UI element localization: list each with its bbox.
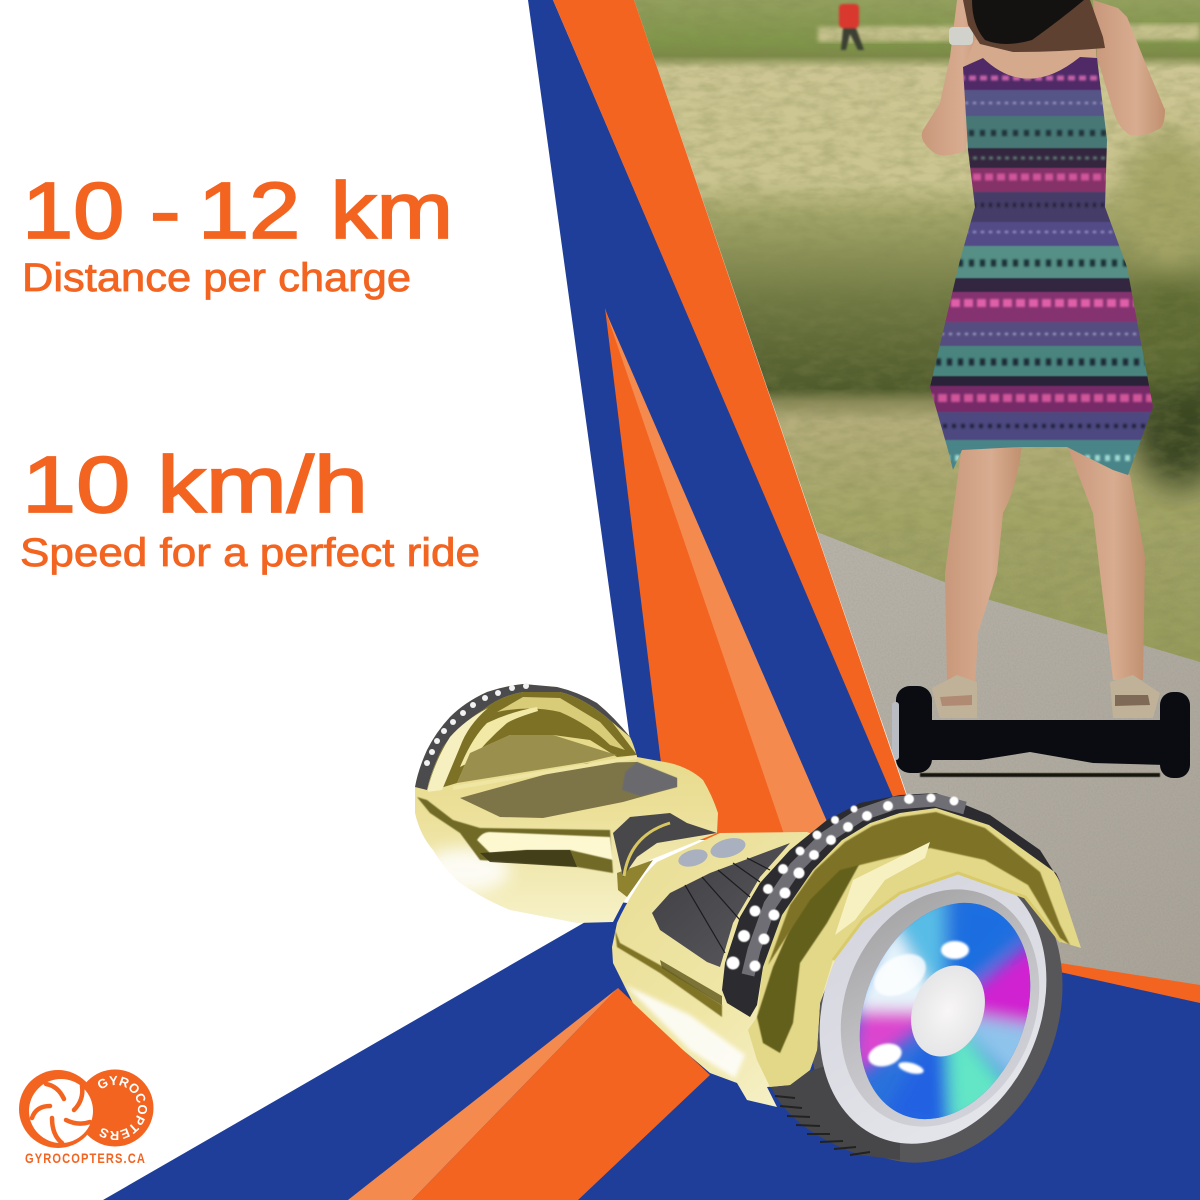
sandals: [932, 675, 1160, 718]
rear fender gold top: [497, 697, 625, 750]
logo URL: GYROCOPTERS.CA: [25, 1150, 146, 1166]
front LED band: [722, 793, 1061, 1017]
logo right disc: [76, 1070, 154, 1146]
rear LED dots: [424, 683, 529, 766]
heading: 10 - 12 km: 10 - 12 km: [22, 167, 453, 256]
panel: photo of rider on path: [630, 0, 1200, 1010]
watch: [949, 27, 973, 45]
footpad ribs: [685, 858, 770, 953]
front fender gold: [748, 808, 1081, 1087]
logo ring text: GYROCOPTERS: [98, 1076, 148, 1140]
rear pad gray end: [622, 762, 677, 796]
rear body: [415, 684, 718, 923]
light orange spike edge: [606, 312, 835, 840]
logo left disc: [19, 1070, 97, 1148]
rear pad lower: [460, 762, 677, 818]
back: [965, 40, 1097, 80]
heading: 10 km/h: 10 km/h: [22, 440, 368, 529]
gold joint below neck: [617, 860, 653, 897]
neck: [613, 813, 717, 877]
fender upper olive: [768, 812, 1070, 965]
label: distance per charge: Distance per charge: [22, 256, 411, 300]
rim outer ring: [780, 834, 1086, 1178]
rear pad upper: [457, 735, 617, 783]
orange right sliver: [1060, 963, 1200, 1003]
legs: [945, 445, 1145, 685]
front body olive reflection: [615, 930, 722, 1017]
rim metal ring: [806, 859, 1074, 1157]
hoverboard shadow: [920, 773, 1160, 777]
rear crossbar: [453, 757, 637, 788]
neck gold collar: [624, 823, 670, 876]
gold hoverboard: [415, 683, 1081, 1163]
fender highlight: [835, 842, 930, 935]
rear LED band: [415, 684, 630, 790]
front body: [612, 832, 880, 1107]
light orange lower stripe: [348, 988, 618, 1200]
LED light disc: [860, 902, 1030, 1120]
fender dark reflection: [757, 863, 860, 1053]
LED highlights: [866, 941, 969, 1076]
rear fender pale strip: [427, 708, 488, 792]
dress motif rows: [925, 78, 1165, 458]
rear dark reflection: [480, 850, 577, 867]
rear body olive reflection: [417, 797, 613, 873]
logo on deck: [676, 835, 748, 870]
front footpad: [652, 843, 790, 967]
rear fender gold: [427, 692, 637, 792]
black hoverboard: [896, 686, 1190, 778]
logo fan opening: [29, 1079, 93, 1143]
hair: [963, 0, 1105, 52]
hubcap glint: [892, 702, 899, 760]
tread marks: [775, 1096, 870, 1155]
fender inner lip: [833, 873, 1061, 960]
rider: [892, 0, 1190, 778]
distant figure: [839, 4, 864, 50]
logo: Gyrocopters: [19, 1070, 154, 1166]
hat: [972, 0, 1084, 44]
blue diagonal band: [528, 0, 893, 840]
blue lower field: [103, 902, 1200, 1200]
arms: [922, 0, 1165, 156]
front lower white glow: [625, 985, 745, 1078]
rear body highlight: [477, 832, 613, 860]
orange spike: [605, 308, 790, 840]
orange diagonal stripe: [553, 0, 907, 797]
LED dots: [726, 794, 958, 972]
spec: speed: [20, 440, 480, 575]
LED band center strip: [748, 800, 965, 975]
tire: [768, 823, 1106, 1200]
gravel path: [800, 532, 1200, 1010]
hub cap: [898, 954, 998, 1068]
rear inner highlight bar: [460, 707, 538, 767]
spec: distance: [22, 167, 453, 300]
rear lower white glow: [420, 848, 510, 892]
wheat field background: [630, 0, 1200, 720]
logo fan blades: [32, 1084, 90, 1143]
front body pale reflection: [660, 960, 722, 1005]
orange lower stripe: [412, 988, 710, 1200]
dress: [925, 50, 1165, 480]
label: speed for a perfect ride: Speed for a perfect ride: [20, 531, 480, 575]
